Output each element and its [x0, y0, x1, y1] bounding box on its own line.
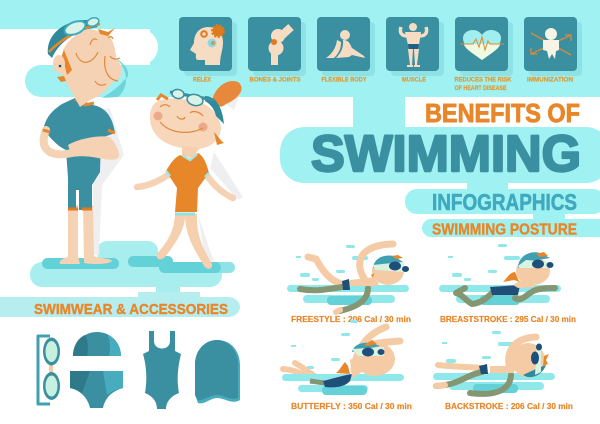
label: breaststroke: BREASTSTROKE : 295 Cal / 30 min	[440, 314, 576, 324]
swimmer: breaststroke	[439, 244, 561, 305]
kickboard	[195, 340, 240, 403]
labels: heart disease	[454, 76, 512, 92]
icon: muscle	[386, 17, 444, 76]
woman figure	[137, 81, 243, 269]
briefs	[70, 371, 123, 408]
background: cyan wave bands	[0, 0, 600, 237]
icon: immunization	[524, 17, 582, 76]
heading: swimming posture: SWIMMING POSTURE	[432, 222, 577, 238]
swimmer: freestyle	[287, 244, 409, 312]
label: backstroke: BACKSTROKE : 206 Cal / 30 min	[445, 401, 573, 411]
goggles	[38, 336, 60, 404]
labels: heart disease: OF HEART DISEASE	[454, 85, 507, 92]
label: butterfly: BUTTERFLY : 350 Cal / 30 min	[291, 401, 412, 411]
label: muscle: MUSCLE	[402, 76, 427, 84]
label: freestyle: FREESTYLE : 206 Cal / 30 min	[291, 314, 411, 324]
woman shadow	[198, 88, 243, 262]
icon: relax	[179, 17, 237, 76]
man arms	[44, 130, 72, 154]
title: benefits of: BENEFITS OF	[425, 98, 580, 128]
woman limbs	[137, 174, 233, 198]
woman suit	[166, 153, 209, 212]
woman head	[150, 99, 221, 149]
icon: flexible body	[317, 17, 375, 76]
icon: heart	[455, 17, 513, 76]
swim cap	[73, 332, 121, 356]
label: relax: RELEX	[193, 76, 212, 84]
heading: swimwear and accessories: SWIMWEAR & ACCESSORIES	[34, 301, 228, 318]
label: immunization: IMMUNIZATION	[527, 76, 573, 84]
man shadow	[93, 108, 124, 255]
swimwear bar	[0, 292, 240, 318]
swimmer: backstroke	[433, 331, 555, 394]
label: bones and joints: BONES & JOINTS	[250, 76, 301, 84]
ground water under figures	[30, 241, 235, 293]
title: swimming: SWIMMING	[311, 125, 581, 182]
man legs	[60, 205, 112, 264]
swimmer: butterfly	[282, 320, 404, 395]
woman hair bun	[212, 81, 242, 107]
man head	[60, 29, 122, 107]
label: flexible body: FLEXIBLE BODY	[322, 76, 367, 84]
labels: heart disease: REDUCES THE RISK	[454, 76, 512, 84]
icon: bones and joints	[248, 17, 306, 76]
man suit	[43, 98, 115, 210]
man figure	[43, 16, 128, 264]
swimsuit	[143, 331, 181, 409]
